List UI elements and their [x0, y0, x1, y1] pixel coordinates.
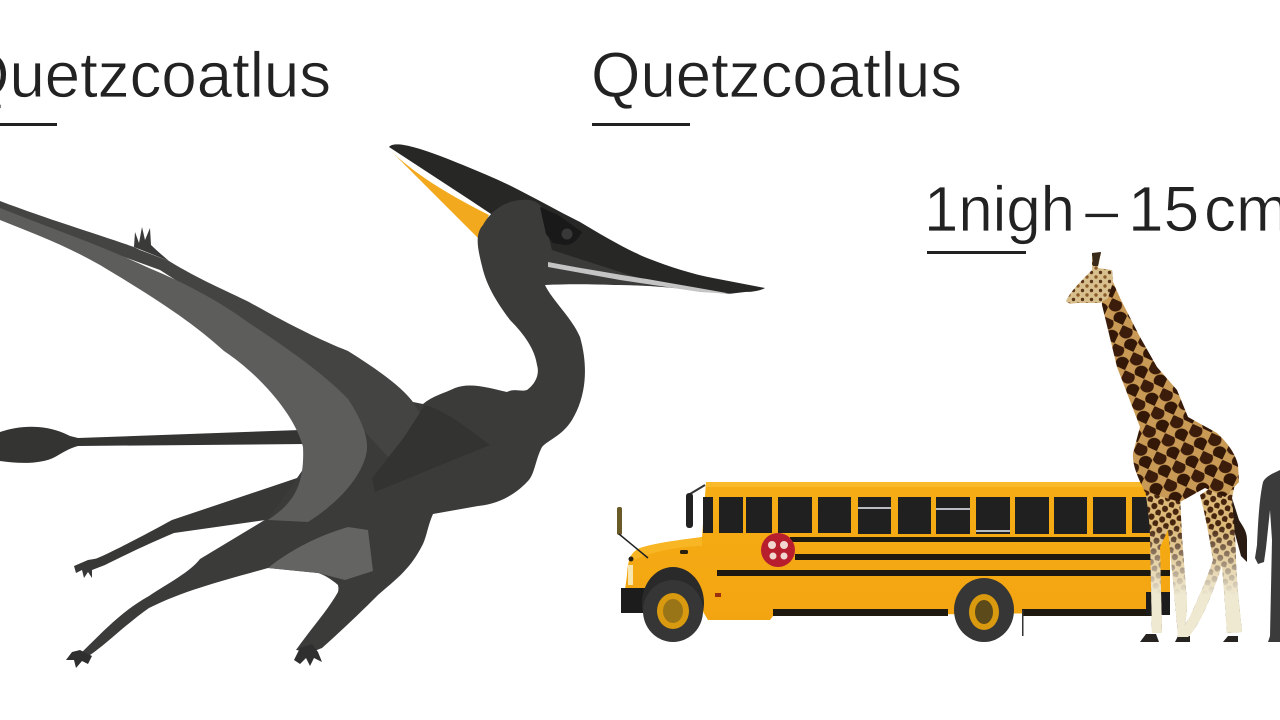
head and horn [1066, 252, 1113, 304]
red badge [761, 533, 795, 567]
far hind leg [74, 477, 300, 578]
neck and body spots [1100, 270, 1239, 502]
illustration: Quetzcoatlus pterosaur [0, 144, 765, 668]
bus body [625, 482, 1170, 620]
label: height 15 cm: 15 [1128, 173, 1199, 245]
illustration: human silhouette [1255, 470, 1280, 642]
tail [1232, 498, 1247, 562]
lower membrane [268, 527, 373, 580]
rear wheel [954, 578, 1024, 642]
leg cream fade [1145, 470, 1242, 637]
eye [540, 207, 582, 245]
mirrors [617, 485, 705, 558]
spotted legs [1145, 470, 1242, 637]
label: height 15 cm: – [1085, 177, 1119, 244]
illustration: giraffe [1066, 252, 1247, 642]
beak highlight [548, 262, 732, 294]
label: height 15 cm: 1nigh [924, 173, 1075, 245]
small body markers [628, 550, 721, 597]
near foot left [66, 650, 92, 668]
yellow crest underside [393, 153, 489, 238]
illustration: yellow school bus [617, 482, 1171, 642]
hooves [1140, 634, 1238, 642]
hood highlight [629, 537, 702, 562]
tail [0, 427, 305, 463]
black stripes [717, 537, 1170, 616]
wing finger claw [134, 227, 169, 261]
main body, head and neck [80, 200, 714, 655]
windows [703, 497, 1150, 534]
label: height 15 cm [924, 173, 1280, 254]
near foot right [294, 644, 322, 666]
bumpers [621, 588, 1170, 615]
upper wing band [0, 201, 430, 470]
crest and upper beak [389, 144, 765, 294]
title: right Quetzcoatlus heading: Quetzcoatlus [591, 39, 962, 111]
wing membrane [0, 208, 367, 522]
dark arm shadow [372, 405, 490, 492]
front wheel [642, 567, 704, 642]
